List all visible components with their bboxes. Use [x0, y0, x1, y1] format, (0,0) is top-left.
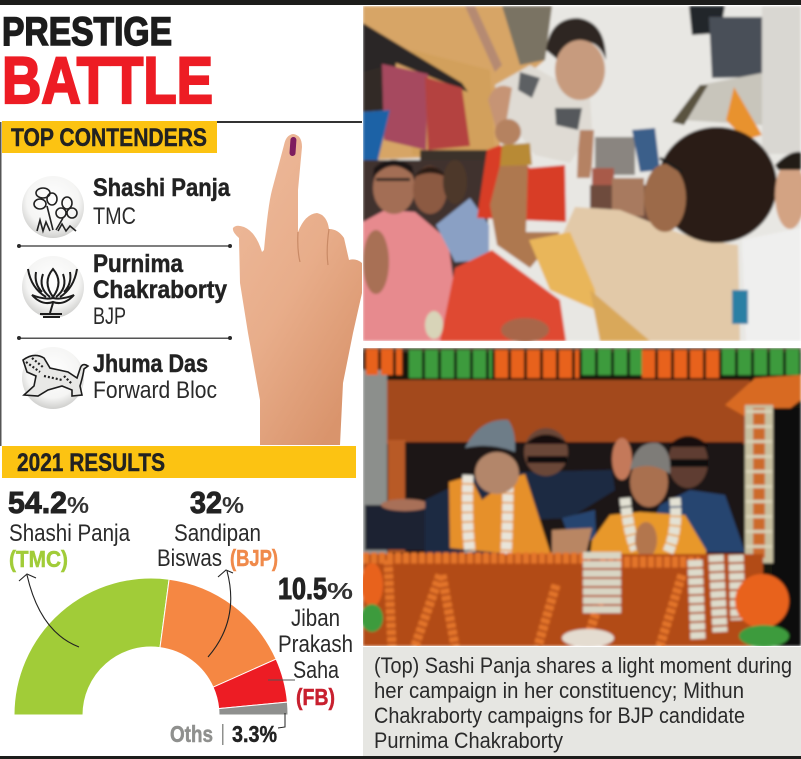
candidate: Purnima Chakraborty [22, 250, 227, 330]
child [477, 18, 606, 222]
label: FB result: Jiban [291, 605, 340, 632]
label: FB result: Prakash [278, 631, 353, 658]
heading: 2021 results: 2021 RESULTS [17, 449, 165, 477]
label: others result [170, 721, 277, 747]
heading: top contenders: TOP CONTENDERS [11, 124, 207, 152]
divider [17, 244, 232, 248]
leader: FB [268, 679, 295, 681]
crowd: woman in white [742, 228, 801, 341]
icon: TMC flowers symbol [22, 176, 84, 238]
title: BATTLE [2, 43, 213, 117]
caption: Chakraborty campaigns for BJP candidate [374, 703, 745, 728]
candidate: Shashi Panja [22, 174, 231, 238]
label: BJP result: Biswas [157, 545, 222, 572]
label: TMC result: 54.2 [8, 485, 67, 520]
label: FB result [278, 571, 353, 710]
segment: FB 10.5% [213, 659, 287, 709]
label: BJP result: (BJP) [230, 545, 278, 571]
heading: 2021 results [2, 446, 356, 478]
segment: TMC 54.2% [14, 578, 169, 715]
caption: her campaign in her constituency; Mithun [374, 678, 744, 703]
label: TMC result: % [67, 492, 89, 518]
security guard, left [524, 428, 569, 476]
label: TMC result: (TMC) [9, 546, 68, 572]
candidate: Shashi Panja: TMC [93, 203, 136, 230]
arrow: TMC [19, 574, 79, 647]
caption: Purnima Chakraborty [374, 728, 563, 753]
label: TMC result: Shashi Panja [9, 520, 131, 547]
photo: Shashi Panja lifting a child [363, 6, 801, 342]
label: TMC result [8, 485, 131, 572]
chart: semi-donut of 2021 vote share [14, 578, 288, 715]
title: PRESTIGE [2, 10, 172, 54]
label: FB result: % [327, 578, 353, 604]
label: others result: 3.3% [232, 721, 277, 747]
label: BJP result: Sandipan [174, 520, 261, 547]
leader: others [278, 713, 285, 728]
icon: Forward Bloc lion symbol [22, 347, 88, 409]
label: FB result: 10.5 [278, 571, 327, 606]
security guard, right [562, 436, 745, 552]
decorated vehicle front [361, 552, 789, 647]
title [2, 10, 213, 117]
Mithun Chakraborty [364, 418, 634, 556]
icon: BJP lotus symbol [22, 256, 84, 318]
crowd: man in pink shirt [363, 159, 456, 341]
top border bar [0, 0, 801, 5]
label: FB result: Saha [293, 657, 340, 684]
bottom border bar [0, 756, 801, 759]
candidate: Jhuma Das: Jhuma Das [93, 350, 208, 378]
label: others result: Oths [170, 721, 213, 747]
candidate: Purnima Chakraborty: Chakraborty [93, 276, 227, 304]
candidate: Jhuma Das [22, 347, 217, 409]
Shashi Panja [490, 127, 777, 341]
arrow: BJP [208, 570, 233, 657]
label: BJP result [157, 485, 278, 572]
candidate: Shashi Panja: Shashi Panja [93, 174, 231, 202]
segment: BJP 32% [160, 579, 276, 687]
photo: Mithun Chakraborty campaigning for Purnima Chakraborty [361, 348, 801, 647]
label: BJP result: 32 [190, 485, 222, 520]
label: BJP result: % [222, 492, 244, 518]
divider [17, 336, 232, 340]
candidate: Jhuma Das: Forward Bloc [93, 377, 217, 404]
candidate: Purnima Chakraborty: Purnima [93, 250, 184, 278]
candidate: Purnima Chakraborty: BJP [93, 303, 126, 330]
illustration: hand with inked finger [233, 134, 362, 445]
segment: others 3.3% [219, 702, 288, 715]
label: FB result: (FB) [296, 684, 335, 710]
crowd: woman in red sari [440, 250, 566, 341]
garland: top marigolds [366, 362, 801, 364]
caption [363, 647, 801, 756]
Purnima Chakraborty [552, 443, 706, 558]
